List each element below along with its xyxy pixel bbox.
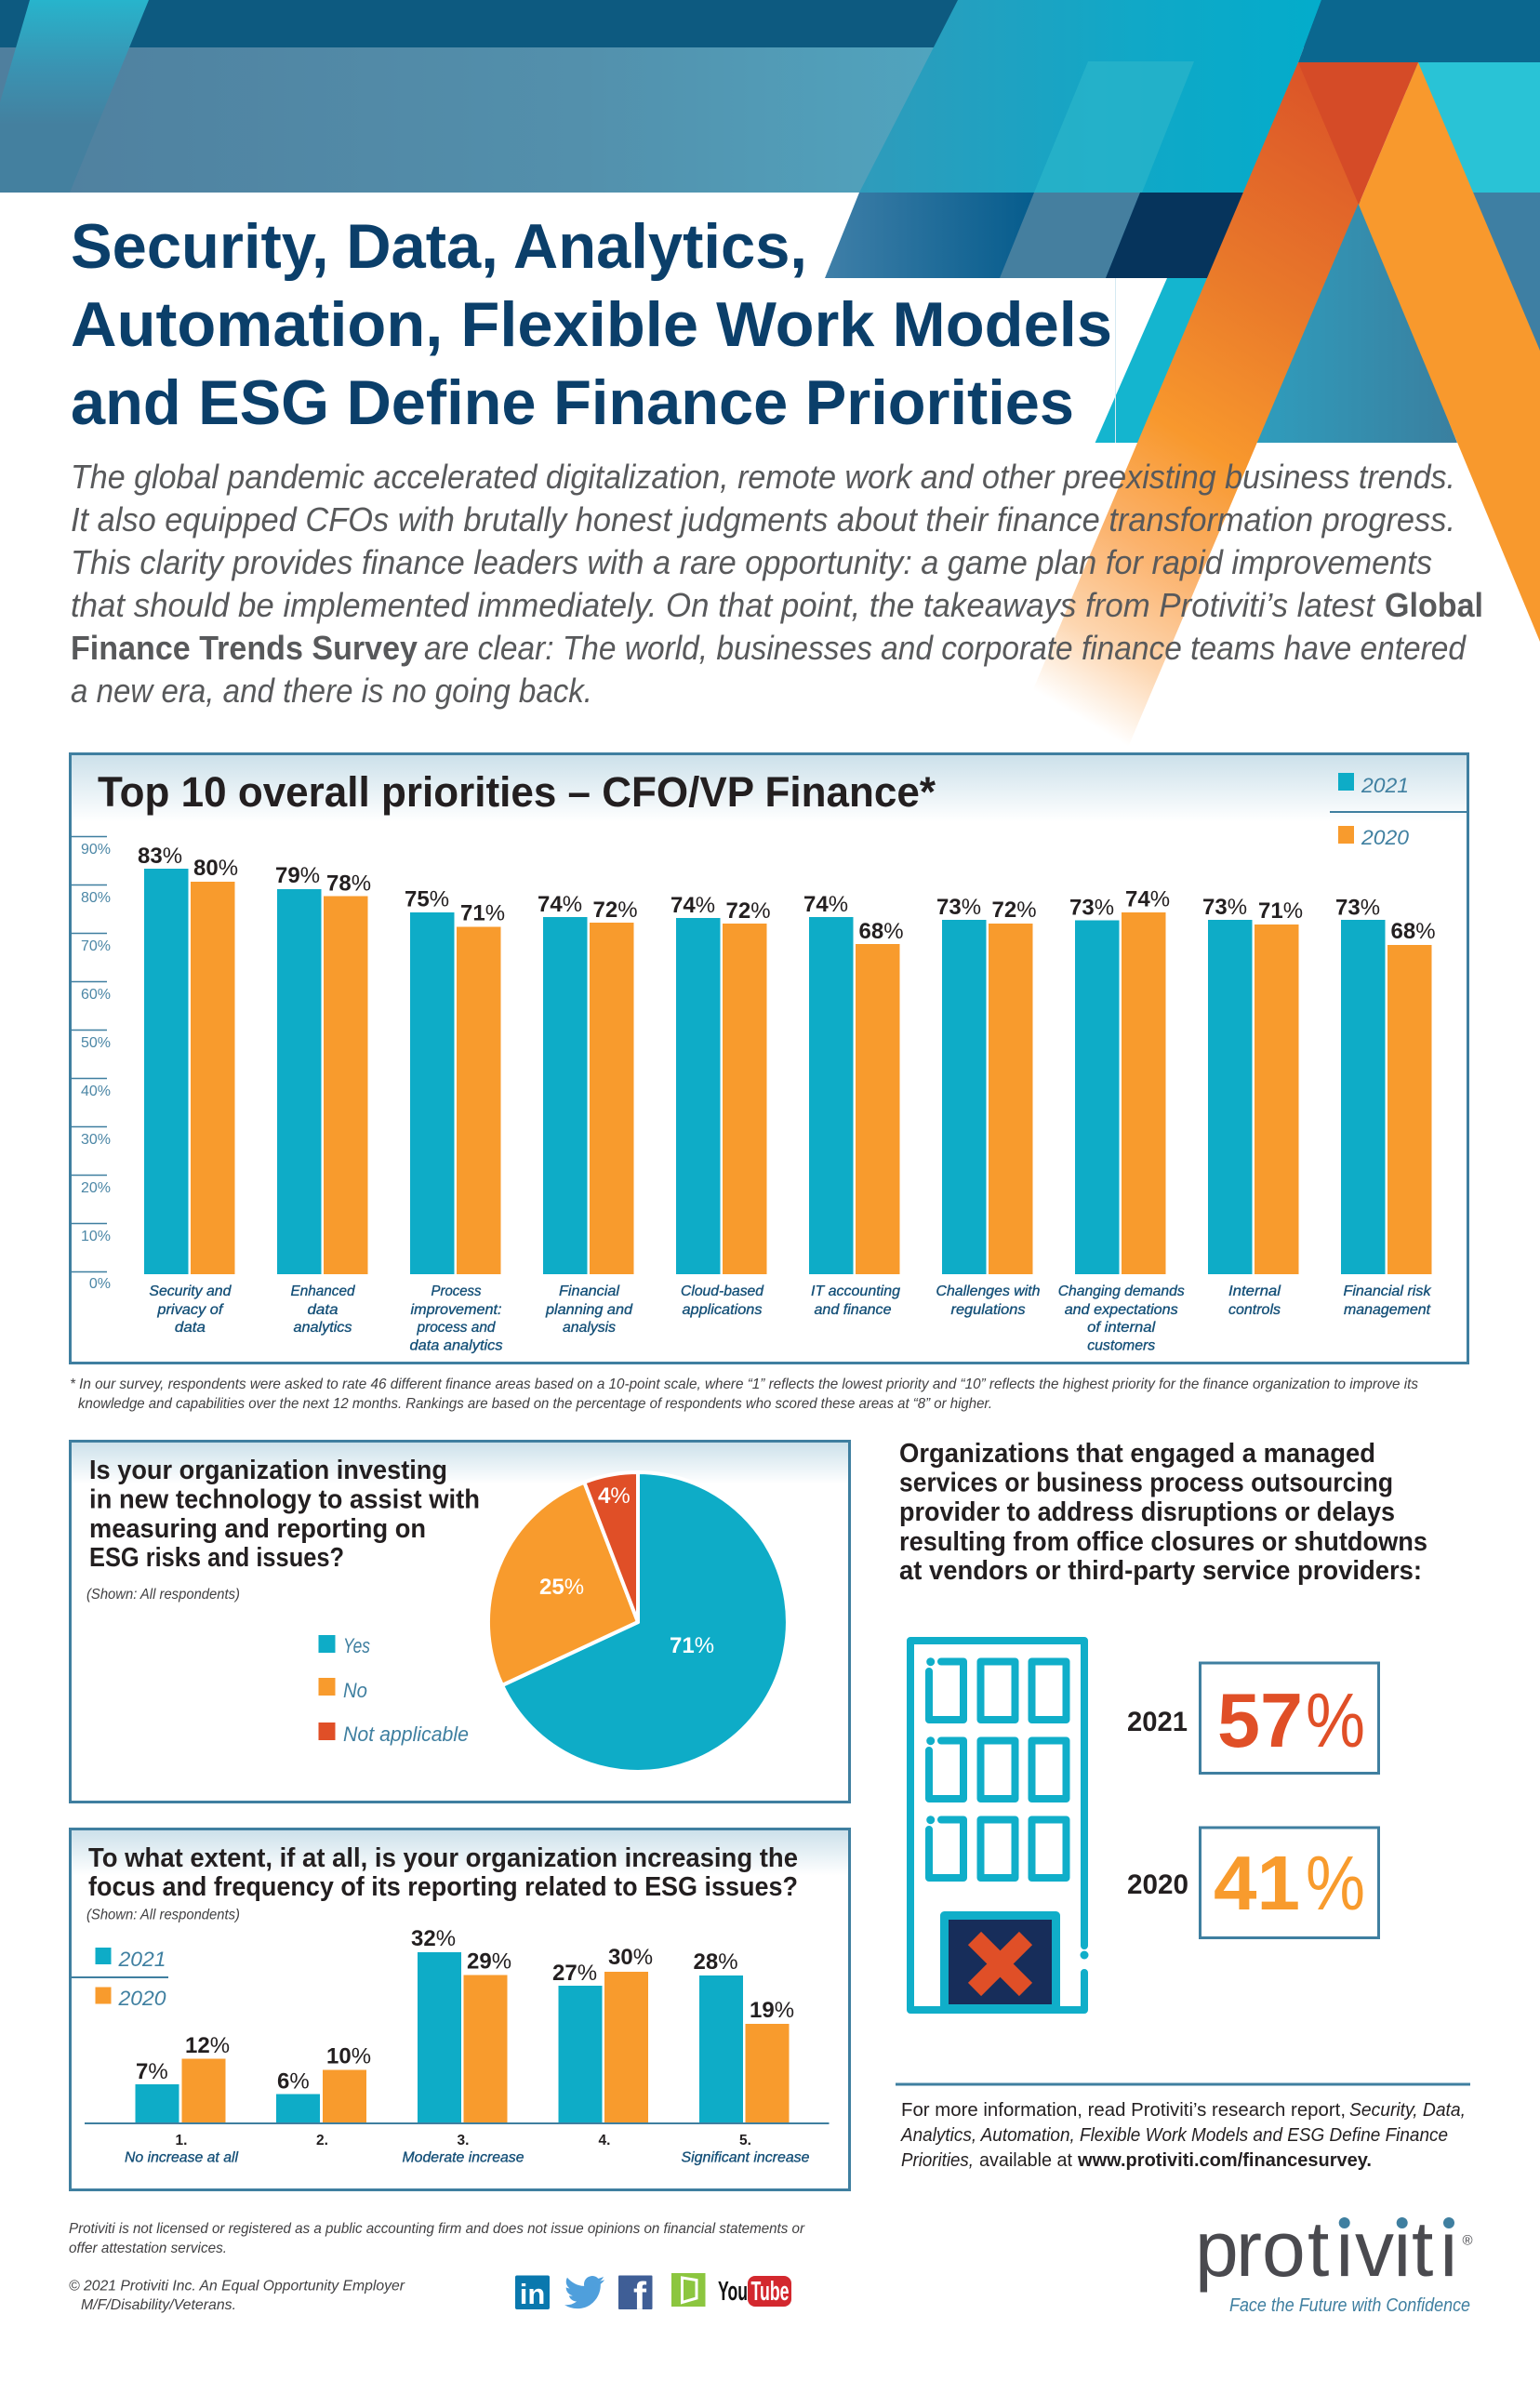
intro paragraph: a new era, and there is no going back. bbox=[71, 672, 592, 710]
pie chart: 25% bbox=[539, 1575, 584, 1600]
bars: 5 significant increase: 19% bbox=[750, 1998, 794, 2023]
bars: enhanced data analytics: analytics bbox=[294, 1320, 352, 1336]
header banner bbox=[0, 0, 1540, 443]
bars: 4 bbox=[552, 1945, 653, 2148]
bars: financial risk management: 73% bbox=[1335, 895, 1380, 921]
bars: 2 bbox=[276, 2044, 371, 2148]
bars: financial planning and analysis: 72% bbox=[593, 898, 638, 923]
bars: financial risk management bbox=[1335, 895, 1436, 1318]
legend: 2021 bbox=[1361, 774, 1409, 797]
pie legend: Yes bbox=[343, 1634, 370, 1657]
disclaimer: Protiviti is not licensed or registered as a public accounting firm and does not issue opinions on financial statements or bbox=[69, 2221, 805, 2237]
icon: closed office building bbox=[910, 1641, 1088, 2010]
pie legend: No bbox=[343, 1679, 367, 1702]
more information block: For more information, read Protiviti’s research report, bbox=[901, 2100, 1346, 2121]
managed services heading: at vendors or third-party service providers: bbox=[899, 1556, 1422, 1586]
intro paragraph: are clear: The world, businesses and corporate finance teams have entered bbox=[424, 629, 1467, 667]
icon: twitter bbox=[564, 2276, 604, 2308]
bars: cloud-based applications: 72% bbox=[725, 898, 771, 924]
question heading: ESG risks and issues? bbox=[89, 1543, 344, 1573]
axis line bbox=[85, 2122, 830, 2124]
y axis: 60% bbox=[81, 987, 111, 1003]
bars: challenges with regulations: 73% bbox=[936, 895, 981, 920]
bars: 2: 6% bbox=[277, 2068, 310, 2095]
pie chart: 4% bbox=[598, 1483, 631, 1509]
copyright: © 2021 Protiviti Inc. An Equal Opportunity Employer bbox=[69, 2279, 405, 2294]
bars: changing demands and expectations bbox=[1058, 887, 1185, 1354]
icon: linkedin: in bbox=[520, 2278, 545, 2310]
legend bbox=[70, 1948, 168, 2010]
bars: 3 moderate increase: 3. bbox=[458, 2133, 469, 2148]
title: and ESG Define Finance Priorities bbox=[71, 367, 1074, 438]
managed services heading bbox=[899, 1439, 1427, 1586]
bars: security and privacy of data: 83% bbox=[138, 844, 182, 869]
icon: green D bbox=[671, 2273, 705, 2307]
bars: 3 moderate increase: 29% bbox=[467, 1949, 511, 1974]
protiviti logo: protiviti bbox=[1195, 2205, 1457, 2293]
intro paragraph: Global bbox=[1385, 586, 1483, 624]
bars: 1 no increase at all bbox=[125, 2033, 238, 2165]
pie legend bbox=[318, 1634, 469, 1746]
bars: cloud-based applications: 74% bbox=[670, 893, 715, 918]
bars: financial planning and analysis: Financial bbox=[559, 1284, 619, 1299]
bars: process improvement: improvement: bbox=[411, 1302, 502, 1318]
bars: enhanced data analytics: 79% bbox=[275, 863, 320, 888]
stat: 2021 57%: 2021 bbox=[1127, 1707, 1188, 1737]
bars: 1 no increase at all: 1. bbox=[176, 2133, 187, 2148]
bars: enhanced data analytics: Enhanced bbox=[290, 1284, 356, 1299]
pie chart bbox=[488, 1472, 788, 1772]
respondents note: (Shown: All respondents) bbox=[86, 1587, 240, 1603]
protiviti logo: Face the Future with Confidence bbox=[1229, 2295, 1470, 2316]
bars: cloud-based applications bbox=[670, 893, 771, 1318]
copyright: M/F/Disability/Veterans. bbox=[81, 2297, 236, 2313]
bars: IT accounting and finance: 74% bbox=[803, 892, 848, 917]
footnote: knowledge and capabilities over the next 12 months. Rankings are based on the percentage of respondents who scored these areas at “8” or higher. bbox=[78, 1396, 992, 1412]
panel: ESG reporting bar chart bbox=[70, 1829, 850, 2189]
legend: 2020 bbox=[1361, 826, 1410, 849]
bars: IT accounting and finance bbox=[803, 892, 904, 1318]
bars: financial risk management: management bbox=[1344, 1302, 1431, 1318]
bars: security and privacy of data bbox=[138, 844, 238, 1336]
bars: 3 moderate increase: 32% bbox=[411, 1926, 456, 1951]
managed services heading: Organizations that engaged a managed bbox=[899, 1439, 1375, 1469]
bars: 1 no increase at all: 7% bbox=[136, 2059, 168, 2084]
footnote bbox=[70, 1377, 1418, 1412]
y axis: 10% bbox=[81, 1229, 111, 1244]
bars: 5 significant increase: Significant increase bbox=[681, 2150, 810, 2165]
bars: changing demands and expectations: Changing demands bbox=[1058, 1284, 1185, 1299]
title: Security, Data, Analytics, bbox=[71, 211, 807, 282]
copyright bbox=[69, 2279, 405, 2313]
bars: security and privacy of data: Security and bbox=[149, 1284, 232, 1299]
question heading: focus and frequency of its reporting related to ESG issues? bbox=[88, 1872, 798, 1902]
bars: changing demands and expectations: customers bbox=[1087, 1337, 1155, 1354]
managed services heading: services or business process outsourcing bbox=[899, 1468, 1393, 1497]
protiviti logo: ® bbox=[1462, 2232, 1473, 2249]
question heading bbox=[88, 1843, 798, 1902]
bars: changing demands and expectations: 73% bbox=[1069, 895, 1114, 921]
intro paragraph: This clarity provides finance leaders with a rare opportunity: a game plan for rapid improvements bbox=[71, 543, 1432, 581]
managed services heading: provider to address disruptions or delays bbox=[899, 1497, 1395, 1527]
bars: changing demands and expectations: of internal bbox=[1087, 1320, 1156, 1336]
bars: internal controls: controls bbox=[1228, 1302, 1281, 1318]
bars: challenges with regulations: 72% bbox=[991, 898, 1037, 923]
panel: top 10 priorities bar chart bbox=[70, 753, 1469, 1363]
bars: 2: 10% bbox=[326, 2044, 371, 2068]
title: Automation, Flexible Work Models bbox=[71, 289, 1112, 360]
bars: IT accounting and finance: IT accounting bbox=[811, 1284, 900, 1299]
more information block: Analytics, Automation, Flexible Work Models and ESG Define Finance bbox=[900, 2125, 1448, 2146]
bars: 5 significant increase: 5. bbox=[739, 2133, 751, 2148]
intro paragraph: Finance Trends Survey bbox=[71, 629, 418, 667]
question heading: measuring and reporting on bbox=[89, 1514, 426, 1544]
managed services heading: resulting from office closures or shutdowns bbox=[899, 1527, 1427, 1557]
y axis: 30% bbox=[81, 1132, 111, 1148]
bars: internal controls: 71% bbox=[1258, 898, 1303, 924]
bars: changing demands and expectations: and expectations bbox=[1065, 1302, 1178, 1318]
bars: internal controls bbox=[1202, 895, 1303, 1318]
icon: linkedin bbox=[515, 2275, 550, 2310]
more information block: www.protiviti.com/financesurvey. bbox=[1077, 2150, 1372, 2171]
y axis bbox=[70, 837, 111, 1292]
bars: 2: 2. bbox=[316, 2133, 328, 2148]
bars: process improvement: data analytics bbox=[409, 1337, 502, 1354]
bars: 1 no increase at all: 12% bbox=[185, 2033, 230, 2058]
intro paragraph bbox=[71, 458, 1483, 710]
stat: 2020 41%: 2020 bbox=[1127, 1869, 1188, 1900]
more information block: available at bbox=[979, 2150, 1072, 2171]
y axis: 90% bbox=[81, 842, 111, 858]
bars: 4: 4. bbox=[599, 2133, 610, 2148]
chart heading: Top 10 overall priorities – CFO/VP Finance* bbox=[98, 768, 936, 816]
bars: security and privacy of data: data bbox=[175, 1320, 206, 1336]
bars: financial planning and analysis: analysis bbox=[563, 1320, 616, 1336]
title bbox=[71, 211, 1112, 438]
bars: IT accounting and finance: 68% bbox=[859, 919, 904, 944]
bars: security and privacy of data: privacy of bbox=[156, 1302, 224, 1318]
legend: 2020 bbox=[117, 1987, 166, 2010]
bars: cloud-based applications: applications bbox=[683, 1302, 763, 1318]
intro paragraph: The global pandemic accelerated digitalization, remote work and other preexisting business trends. bbox=[71, 458, 1455, 496]
pie chart: 71% bbox=[670, 1633, 714, 1658]
bars: 5 significant increase bbox=[681, 1949, 810, 2165]
y axis: 20% bbox=[81, 1180, 111, 1196]
bars: financial risk management: Financial risk bbox=[1343, 1284, 1432, 1299]
bars: IT accounting and finance: and finance bbox=[815, 1302, 892, 1318]
stat: 2020 41%: % bbox=[1306, 1840, 1365, 1926]
more information block bbox=[896, 2083, 1470, 2171]
stat: 2021 57%: % bbox=[1306, 1677, 1365, 1763]
more information block: Security, Data, bbox=[1349, 2100, 1466, 2121]
stat: 2021 57% bbox=[1127, 1663, 1378, 1773]
question heading: Is your organization investing bbox=[89, 1456, 447, 1485]
bars: 4: 27% bbox=[552, 1961, 597, 1986]
bars: internal controls: 73% bbox=[1202, 895, 1247, 920]
bars: 1 no increase at all: No increase at all bbox=[125, 2150, 238, 2165]
bars: process improvement: Process bbox=[431, 1284, 482, 1299]
bars: enhanced data analytics: 78% bbox=[326, 871, 371, 897]
bars: 4: 30% bbox=[608, 1945, 653, 1970]
bars: changing demands and expectations: 74% bbox=[1125, 887, 1170, 911]
bars: financial risk management: 68% bbox=[1391, 919, 1436, 944]
orange A-shaped graphic bbox=[1026, 62, 1540, 763]
bars: challenges with regulations: regulations bbox=[950, 1302, 1025, 1318]
y axis: 70% bbox=[81, 938, 111, 954]
icon: facebook bbox=[618, 2274, 653, 2318]
bars: enhanced data analytics: data bbox=[307, 1302, 339, 1318]
bars: 5 significant increase: 28% bbox=[694, 1949, 738, 1975]
y axis: 50% bbox=[81, 1035, 111, 1051]
legend bbox=[1330, 773, 1469, 849]
question heading: in new technology to assist with bbox=[89, 1484, 480, 1514]
footnote: * In our survey, respondents were asked to rate 46 different finance areas based on a 10-point scale, where “1” reflects the lowest priority and “10” reflects the highest priority for the finance organization to improve its bbox=[70, 1377, 1418, 1392]
bars: financial planning and analysis: planning and bbox=[545, 1302, 633, 1318]
bars: financial planning and analysis bbox=[538, 892, 638, 1336]
y axis: 80% bbox=[81, 890, 111, 906]
disclaimer bbox=[69, 2221, 805, 2256]
stat: 2021 57%: 57 bbox=[1217, 1677, 1303, 1763]
respondents note: (Shown: All respondents) bbox=[86, 1907, 240, 1923]
intro paragraph: that should be implemented immediately. On that point, the takeaways from Protiviti’s latest bbox=[71, 586, 1376, 624]
legend: 2021 bbox=[117, 1948, 166, 1971]
y axis: 0% bbox=[89, 1276, 111, 1292]
bars: cloud-based applications: Cloud-based bbox=[681, 1284, 764, 1299]
stat: 2020 41% bbox=[1127, 1828, 1378, 1938]
bars: enhanced data analytics bbox=[275, 863, 371, 1336]
bars: challenges with regulations: Challenges with bbox=[936, 1284, 1041, 1299]
more information block: Priorities, bbox=[901, 2150, 974, 2171]
bars: 3 moderate increase: Moderate increase bbox=[402, 2150, 524, 2165]
icon: youtube: You bbox=[718, 2277, 748, 2307]
bars: challenges with regulations bbox=[936, 895, 1041, 1318]
bars: process improvement: process and bbox=[417, 1320, 497, 1336]
icon: facebook: f bbox=[633, 2274, 647, 2318]
bars: process improvement bbox=[405, 887, 505, 1354]
disclaimer: offer attestation services. bbox=[69, 2241, 227, 2256]
panel: ESG technology investment pie chart bbox=[71, 1442, 850, 1802]
bars: process improvement: 71% bbox=[460, 900, 505, 926]
stat: 2020 41%: 41 bbox=[1214, 1840, 1300, 1926]
icon: youtube: Tube bbox=[751, 2277, 789, 2307]
question heading bbox=[89, 1456, 480, 1573]
bars: financial planning and analysis: 74% bbox=[538, 892, 582, 917]
bars: internal controls: Internal bbox=[1228, 1284, 1281, 1299]
bars: 3 moderate increase bbox=[402, 1926, 524, 2165]
y axis: 40% bbox=[81, 1084, 111, 1099]
question heading: To what extent, if at all, is your organization increasing the bbox=[88, 1843, 798, 1873]
pie legend: Not applicable bbox=[343, 1723, 469, 1746]
icon: youtube bbox=[718, 2276, 791, 2307]
bars: security and privacy of data: 80% bbox=[193, 856, 238, 881]
intro paragraph: It also equipped CFOs with brutally honest judgments about their finance transformation progress. bbox=[71, 500, 1455, 539]
bars: process improvement: 75% bbox=[405, 887, 449, 911]
